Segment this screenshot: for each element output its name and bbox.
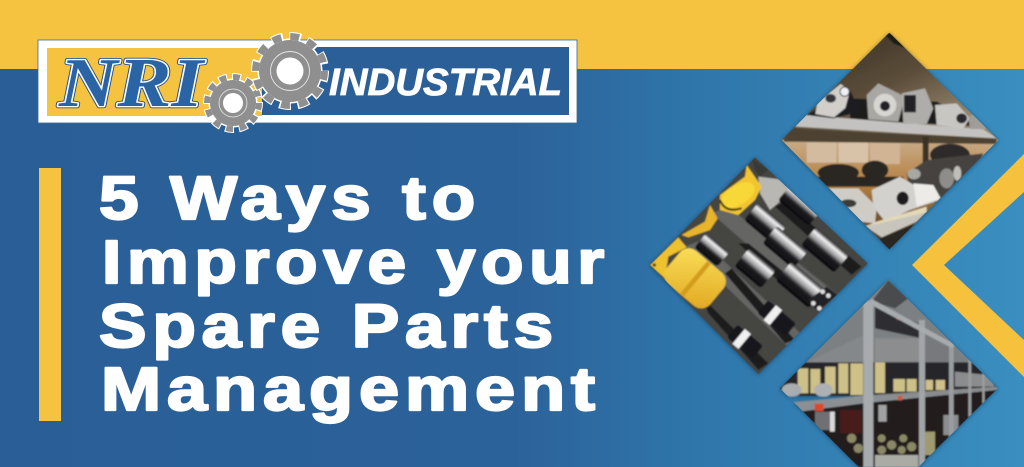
- logo wordmark: NRI: NRI: [58, 45, 206, 122]
- title: Management: [101, 355, 601, 423]
- logo: NRI Industrial: [38, 36, 577, 129]
- red shelf labels: [815, 404, 824, 411]
- yellow top band: [0, 0, 1024, 69]
- yellow chevron arrow: [912, 154, 1024, 377]
- lower shelf board: [865, 212, 927, 237]
- yellow parts: [720, 165, 762, 215]
- logo wordmark: NRI: NRI: [58, 45, 206, 122]
- upper shelf goods: [775, 362, 1008, 396]
- yellow accent bar: [39, 168, 61, 421]
- large yellow roller: [664, 247, 727, 310]
- shelf boards: [780, 387, 998, 412]
- lower shelf starter motors: [828, 188, 877, 223]
- icon: large gear: [256, 36, 324, 106]
- lower shelf silhouettes: [818, 164, 859, 181]
- upper shelf parts: [807, 90, 860, 118]
- diagonal rails: [686, 210, 836, 346]
- upper beam: [867, 299, 955, 348]
- title: Improve your: [102, 228, 610, 296]
- steel shelf uprights: [863, 298, 873, 467]
- photo: warehouse shelving with brass parts: [775, 275, 1008, 467]
- logo wordmark: INDUSTRIAL: INDUSTRIAL: [329, 62, 562, 104]
- icon: small gear: [207, 77, 259, 129]
- photo: starter motors on shelves: [770, 30, 1005, 253]
- steel shafts: [778, 188, 818, 224]
- title: 5 Ways to: [99, 164, 481, 232]
- title: Spare Parts: [99, 292, 559, 360]
- lower shelf: [795, 390, 998, 467]
- logo wordmark: NRI: NRI: [58, 45, 206, 122]
- title: [99, 164, 610, 423]
- upper shelf dark backing: [850, 98, 970, 126]
- photo: yellow rollers and steel shafts: [649, 157, 869, 376]
